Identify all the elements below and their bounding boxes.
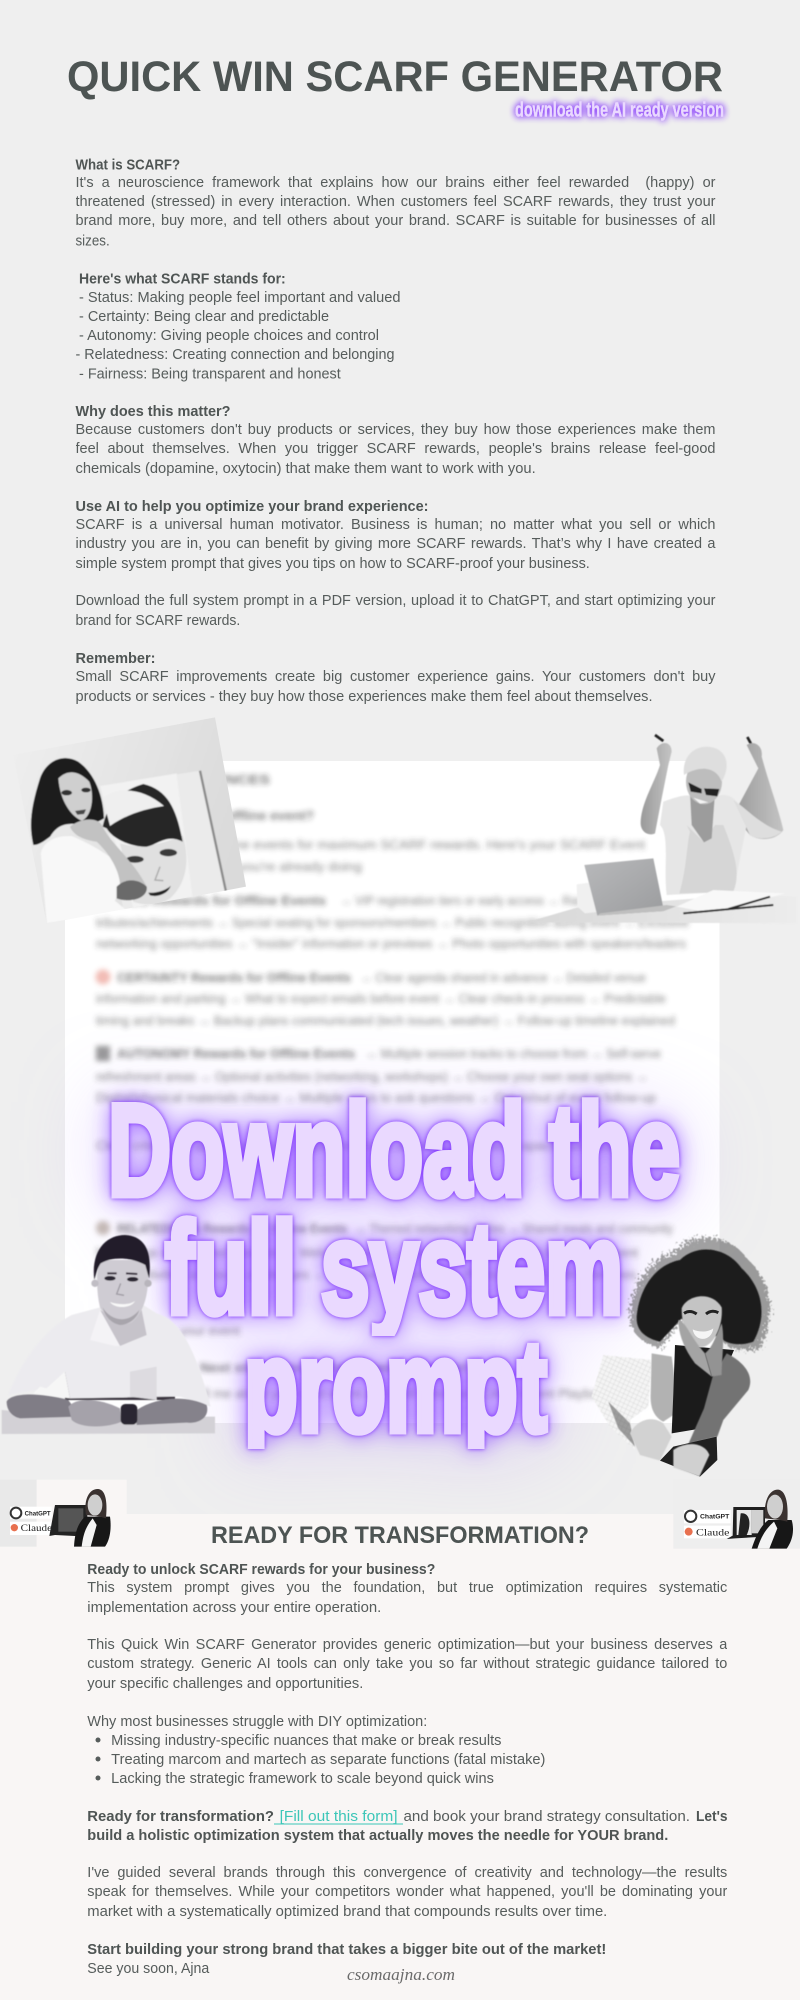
text block: what SCARF stands for: - Fairness: Being transparent and honest (79, 366, 341, 382)
panel: blurred system prompt document: How to improve my offline event? (96, 808, 314, 823)
panel: blurred system prompt document: Name tags with shared interests → Welcome hosts → Community chat groups before the event (96, 1245, 638, 1260)
image: AI tools badge right (673, 1480, 800, 1549)
bullet list: DIY struggles: Why most businesses struggle with DIY optimization: (87, 1714, 427, 1730)
image: AI tools badge left: Claude (21, 1523, 52, 1533)
panel: blurred system prompt document: RELATEDNESS Rewards for Offline Events (117, 1221, 347, 1236)
text block: generic optimization: custom strategy. Generic AI tools can only take you so far without strategic guidance tailored to (87, 1656, 727, 1672)
image: AI tools badge left (0, 1480, 127, 1547)
text block: ready to unlock: implementation across your entire operation. (87, 1600, 381, 1616)
panel: blurred system prompt document: Clear criteria for special access → Open feedback sessions → Honest capacity and waitlist rules (96, 1138, 667, 1153)
panel: blurred system prompt document: AUTONOMY Rewards for Offline Events (117, 1046, 355, 1061)
panel: blurred system prompt document: Digital/physical materials choice → Multiple ways to ask questions → Opt-in/out of event follow-up (96, 1090, 656, 1105)
title: QUICK WIN SCARF GENERATOR (67, 53, 723, 101)
panel: blurred system prompt document: CERTAINTY Rewards for Offline Events (117, 970, 351, 985)
text block: use AI (76, 499, 716, 629)
text block: use AI: industry you are in, you can benefit by giving more SCARF rewards. That’s why I have created a (76, 536, 716, 552)
text block: why does this matter: Because customers don't buy products or services, they buy how those experiences make them (76, 422, 716, 438)
text block: what SCARF stands for: - Status: Making people feel important and valued (79, 290, 401, 306)
text block: why does this matter (76, 404, 716, 477)
bottom section background (0, 1514, 800, 2000)
text block: ready to unlock: This system prompt gives you the foundation, but true optimization requires systematic (87, 1580, 727, 1596)
text block: what SCARF stands for: - Relatedness: Creating connection and belonging (76, 347, 394, 363)
text block: what SCARF stands for: Here's what SCARF stands for: (79, 271, 286, 287)
image: AI tools badge right: Claude (696, 1528, 729, 1538)
text block: what is SCARF: It's a neuroscience framework that explains how our brains either feel rewarded (happy) or (76, 175, 716, 191)
sign-off: Start building your strong brand that takes a bigger bite out of the market! (87, 1942, 606, 1958)
text block: guided brands (87, 1864, 727, 1920)
bullet list: DIY struggles (87, 1714, 545, 1787)
photo: woman with portrait poster (30, 718, 246, 922)
heading: ready for transformation: READY FOR TRANSFORMATION? (211, 1522, 589, 1549)
text block: why does this matter: chemicals (dopamine, oxytocin) that make them want to work with you. (76, 461, 536, 477)
text block: what is SCARF: What is SCARF? (76, 157, 180, 173)
photo: laughing woman with afro (592, 1237, 770, 1477)
panel: blurred system prompt document: Playbook beyond what you're already doing (96, 859, 362, 874)
panel: blurred system prompt document: Group activities and team challenges → Post-event meetups → Photos shared with attendees (96, 1267, 636, 1282)
panel: blurred system prompt document: → VIP registration tiers or early access → Rank (340, 893, 590, 908)
website signature: csomaajna.com (347, 1965, 455, 1984)
image: AI tools badge left: ChatGPT (25, 1511, 51, 1517)
text block: use AI: Download the full system prompt in a PDF version, upload it to ChatGPT, and start optimizing your (76, 592, 716, 608)
panel: blurred system prompt document: Next step: choose three rewards to start with (200, 1360, 500, 1375)
text block: guided brands: speak for themselves. While your competitors wonder what happened, you'll be dominating your (87, 1884, 727, 1900)
text block: ready to unlock (87, 1562, 727, 1616)
panel: blurred system prompt document: → Clear agenda shared in advance → Detailed venue (360, 970, 646, 985)
text block: what SCARF stands for (76, 271, 401, 382)
panel: blurred system prompt document (65, 761, 720, 1423)
text block: remember: products or services - they buy how those experiences make them feel about themselves. (76, 689, 652, 705)
call to action with form link: [Fill out this form] (280, 1809, 398, 1825)
text block: what SCARF stands for: - Autonomy: Giving people choices and control (79, 328, 379, 344)
call to action with form link: build a holistic optimization system that actually moves the needle for YOUR brand. (87, 1828, 668, 1844)
subtitle: download the AI ready version: download the AI ready version (515, 100, 724, 122)
call to action with form link: and book your brand strategy consultation. (404, 1809, 690, 1825)
panel: blurred system prompt document: refreshment areas → Optional activities (networking, workshops) → Choose your own seat options → (96, 1069, 648, 1084)
call to action with form link: Ready for transformation? (87, 1809, 274, 1825)
text block: what is SCARF (76, 157, 716, 249)
text block: ready to unlock: Ready to unlock SCARF rewards for your business? (87, 1562, 435, 1578)
panel: blurred system prompt document: Tell me about your next event and I will tailor the SCARF Event Playbook (190, 1386, 612, 1401)
big headline: download the full system prompt: prompt (244, 1313, 547, 1459)
text block: remember (76, 651, 716, 705)
panel: blurred system prompt document: networking opportunities → "Insider" information or previews → Photo opportunities with speakers/leaders (96, 936, 686, 951)
panel: blurred system prompt document: tributes/achievements → Special seating for sponsors/members → Public recognition during event → Exclusive (96, 915, 689, 930)
text block: why does this matter: feel about themselves. When you trigger SCARF rewards, people's brains release feel-good (76, 440, 716, 456)
text block: generic optimization: This Quick Win SCARF Generator provides generic optimization—but your business deserves a (87, 1636, 727, 1652)
text block: guided brands: market with a systematically optimized brand that compounds results over time. (87, 1904, 607, 1920)
bullet list: DIY struggles: Lacking the strategic framework to scale beyond quick wins (111, 1771, 494, 1787)
sign-off: See you soon, Ajna (87, 1961, 210, 1977)
big headline: download the full system prompt (108, 1077, 680, 1459)
text block: use AI: simple system prompt that gives you tips on how to SCARF-proof your business. (76, 556, 590, 572)
panel: blurred system prompt document: timing and breaks → Backup plans communicated (tech issues, weather) → Follow-up timeline explained (96, 1013, 675, 1028)
panel: blurred system prompt document: STATUS Rewards for Offline Events (96, 893, 326, 908)
panel: blurred system prompt document: Let's optimize your offline events for maximum SCARF rewards. Here's your SCARF Event (96, 837, 645, 852)
panel: blurred system prompt document: → Multiple session tracks to choose from → Self-serve (365, 1046, 661, 1061)
text block: use AI: brand for SCARF rewards. (76, 613, 240, 629)
text block: what is SCARF: threatened (stressed) in every interaction. When customers feel SCARF rewards, they trust your (76, 194, 716, 210)
text block: remember: Remember: (76, 651, 156, 667)
text block: use AI: SCARF is a universal human motivator. Business is human; no matter what you sell or which (76, 516, 716, 532)
call to action with form link (87, 1809, 728, 1844)
text block: why does this matter: Why does this matter? (76, 404, 231, 420)
text block: guided brands: I've guided several brands through this convergence of creativity and technology—the results (87, 1864, 727, 1880)
bullet list: DIY struggles: Treating marcom and martech as separate functions (fatal mistake) (111, 1752, 545, 1768)
text block: use AI: Use AI to help you optimize your brand experience: (76, 499, 428, 515)
image: AI tools badge right: ChatGPT (700, 1515, 730, 1521)
text block: generic optimization (87, 1636, 727, 1692)
panel: blurred system prompt document: information and parking → What to expect emails before event → Clear check-in process → Predictable (96, 991, 666, 1006)
sign-off (87, 1942, 606, 1977)
text block: what is SCARF: brand more, buy more, and tell others about your brand. SCARF is suitable for businesses of all (76, 213, 716, 229)
text block: what SCARF stands for: - Certainty: Being clear and predictable (79, 309, 329, 325)
text block: generic optimization: your specific challenges and opportunities. (87, 1676, 363, 1692)
panel: blurred system prompt document: your event (180, 1323, 240, 1338)
panel: blurred system prompt document: → Themed networking circles → Shared meals and community (355, 1221, 673, 1236)
panel: blurred system prompt document: SCARF EXPERIENCES (96, 772, 270, 787)
text block: what is SCARF: sizes. (76, 233, 110, 249)
bullet list: DIY struggles: Missing industry-specific nuances that make or break results (111, 1733, 501, 1749)
text block: remember: Small SCARF improvements create big customer experience gains. Your customers don't buy (76, 668, 716, 684)
photo: smiling man at desk (2, 1235, 215, 1434)
photo: excited woman at laptop (527, 735, 797, 923)
call to action with form link: Let's (696, 1809, 728, 1825)
